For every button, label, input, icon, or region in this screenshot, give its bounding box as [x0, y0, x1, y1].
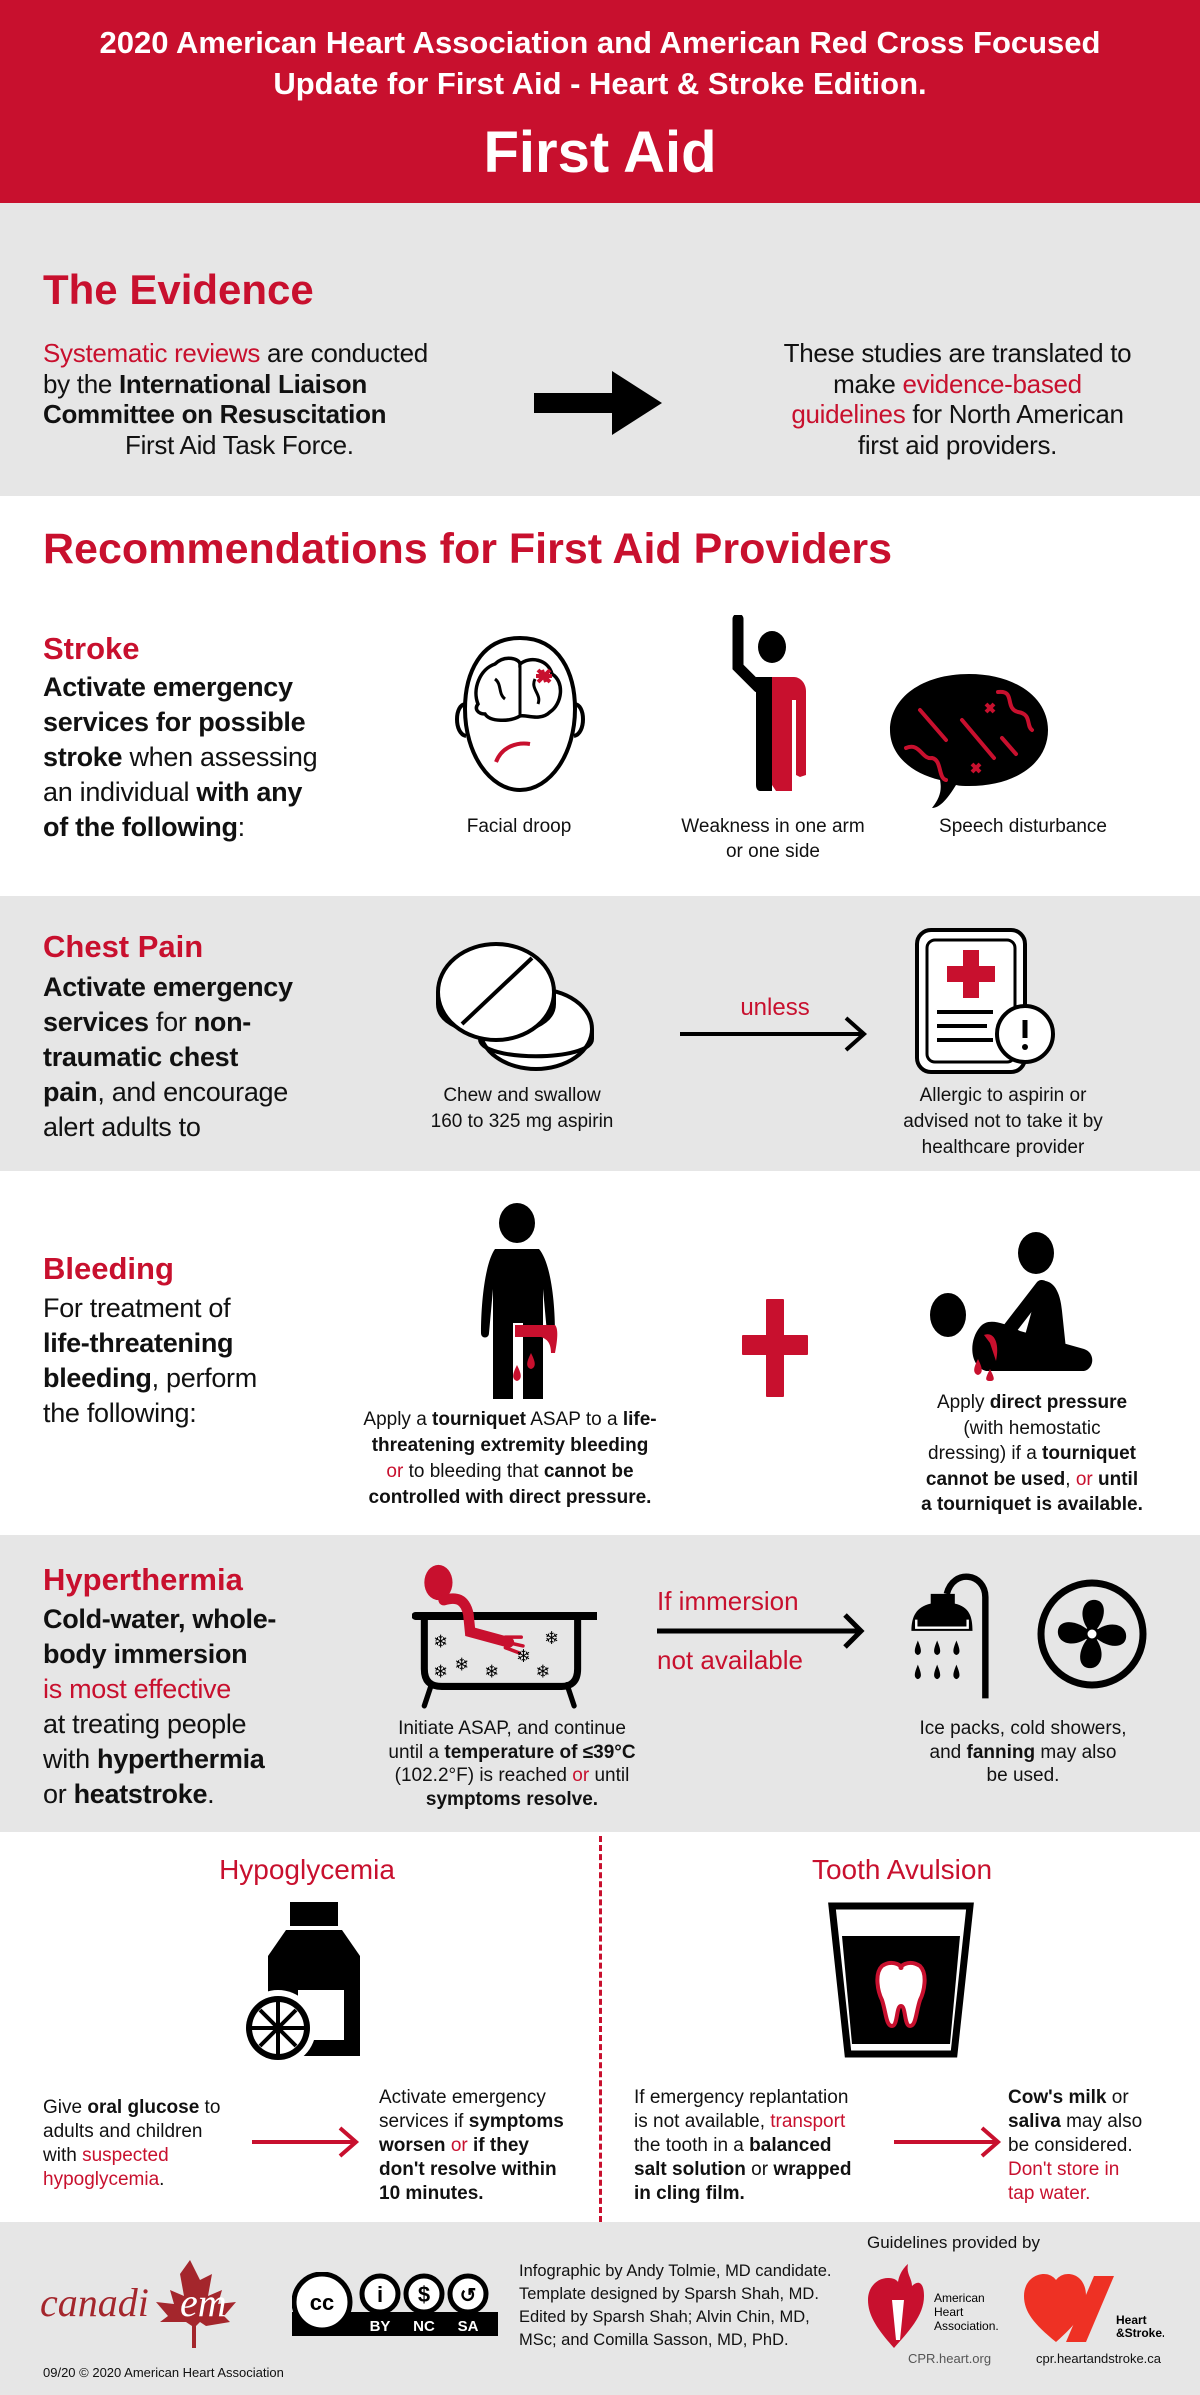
- credits text: MSc; and Comilla Sasson, MD, PhD.: [519, 2331, 789, 2349]
- icon: bathtub: ❄: [484, 1663, 499, 1683]
- icon: bathtub: ❄: [454, 1656, 469, 1676]
- activate ems text: 10 minutes.: [379, 2183, 484, 2204]
- tourniquet label: or to bleeding that cannot be: [386, 1461, 634, 1482]
- tourniquet label: Apply a tourniquet ASAP to a life-: [363, 1409, 657, 1430]
- recommendations heading: Recommendations for First Aid Providers: [43, 525, 892, 573]
- activate ems text: don't resolve within: [379, 2159, 557, 2180]
- chest pain text: traumatic chest: [43, 1042, 238, 1072]
- milk or saliva text: [1008, 2087, 1142, 2204]
- immersion label: until a temperature of ≤39°C: [388, 1742, 636, 1762]
- hyperthermia text: is most effective: [43, 1674, 231, 1704]
- logo: canadiem: canadi: [40, 2280, 149, 2325]
- arrow: hypoglycemia: [252, 2126, 359, 2158]
- hyperthermia text: with hyperthermia: [43, 1744, 264, 1774]
- icon: glucose bottle with lemon: [246, 1902, 360, 2060]
- icon: aspirin pills: [436, 942, 594, 1071]
- panel: tooth avulsion: [634, 1854, 1142, 2204]
- logo: heart and stroke: [1024, 2274, 1164, 2344]
- unless label: unless: [740, 994, 810, 1021]
- aspirin label: Chew and swallow: [443, 1085, 601, 1106]
- oral glucose text: with suspected: [43, 2145, 169, 2166]
- activate ems text: Activate emergency: [379, 2087, 546, 2108]
- panel: bleeding: [43, 1203, 1143, 1515]
- alternatives label: be used.: [987, 1765, 1059, 1786]
- evidence heading: The Evidence: [43, 266, 314, 313]
- stroke text: services for possible: [43, 707, 305, 737]
- transport text: If emergency replantation: [634, 2087, 848, 2108]
- alternatives label: Ice packs, cold showers,: [920, 1718, 1126, 1739]
- arrow: tooth: [894, 2126, 1001, 2158]
- milk or saliva text: Cow's milk or: [1008, 2087, 1129, 2108]
- tourniquet label: controlled with direct pressure.: [369, 1487, 651, 1508]
- logo: american heart association: American: [934, 2291, 985, 2305]
- tourniquet label: [363, 1409, 657, 1508]
- logo: creative commons: cc: [310, 2290, 334, 2315]
- bleeding text: [43, 1293, 257, 1428]
- stroke text: Activate emergency: [43, 672, 293, 702]
- bleeding text: the following:: [43, 1398, 196, 1428]
- logo: heart and stroke: &Stroke.: [1116, 2326, 1164, 2340]
- aha url: CPR.heart.org: [908, 2351, 991, 2366]
- icon: bathtub: ❄: [433, 1633, 448, 1653]
- chest pain text: services for non-: [43, 1007, 251, 1037]
- logo: creative commons: i: [377, 2282, 383, 2307]
- icon: direct pressure: [930, 1232, 1092, 1381]
- header banner: [0, 0, 1200, 203]
- hyperthermia text: body immersion: [43, 1639, 247, 1669]
- panel: hypoglycemia: [43, 1854, 564, 2204]
- milk or saliva text: be considered.: [1008, 2135, 1133, 2156]
- allergic label: healthcare provider: [922, 1137, 1084, 1158]
- direct pressure label: cannot be used, or until: [926, 1468, 1138, 1490]
- icon: plus: [742, 1299, 808, 1397]
- stroke icon labels: Facial droop: [467, 816, 571, 837]
- direct pressure label: (with hemostatic: [963, 1418, 1101, 1438]
- hypoglycemia heading: Hypoglycemia: [219, 1854, 395, 1885]
- transport text: [634, 2087, 851, 2204]
- transport text: is not available, transport: [634, 2111, 845, 2132]
- logo: american heart association: [868, 2260, 1008, 2352]
- icon: fan: [1038, 1580, 1146, 1688]
- chest pain text: Activate emergency: [43, 972, 293, 1002]
- hyperthermia text: or heatstroke.: [43, 1779, 214, 1809]
- credits text: [519, 2260, 831, 2352]
- panel: chest pain: [0, 896, 1200, 1171]
- icon: one-sided weakness figure: [732, 615, 806, 791]
- tourniquet label: threatening extremity bleeding: [372, 1435, 648, 1456]
- stroke text: stroke when assessing: [43, 742, 317, 772]
- immersion label: [388, 1718, 636, 1810]
- oral glucose text: hypoglycemia.: [43, 2169, 164, 2190]
- evidence left text: [43, 338, 428, 460]
- panel: hyperthermia: [0, 1535, 1200, 1832]
- credits text: Infographic by Andy Tolmie, MD candidate.: [519, 2262, 831, 2280]
- heart and stroke url: cpr.heartandstroke.ca: [1036, 2351, 1161, 2366]
- alternatives label: [920, 1718, 1126, 1786]
- icon: clipboard: [915, 928, 1055, 1074]
- stroke text: [43, 672, 317, 842]
- milk or saliva text: tap water.: [1008, 2183, 1090, 2204]
- icon: speech bubble: [890, 674, 1048, 808]
- icon: bathtub: ❄: [516, 1647, 531, 1667]
- guidelines provided by: Guidelines provided by: [867, 2233, 1040, 2252]
- hyperthermia text: [43, 1604, 276, 1809]
- main title: First Aid: [483, 120, 717, 185]
- logo: creative commons: NC: [413, 2318, 435, 2335]
- evidence right text: These studies are translated to: [784, 338, 1131, 368]
- immersion label: symptoms resolve.: [426, 1788, 598, 1810]
- icon: bathtub: ❄: [433, 1663, 448, 1683]
- logo: american heart association: Heart: [934, 2305, 964, 2319]
- evidence left text: by the International Liaison: [43, 368, 367, 398]
- hyperthermia heading: Hyperthermia: [43, 1562, 243, 1597]
- direct pressure label: Apply direct pressure: [937, 1392, 1127, 1413]
- arrow: unless: [680, 1016, 867, 1052]
- allergic label: [903, 1085, 1103, 1158]
- allergic label: Allergic to aspirin or: [920, 1085, 1086, 1106]
- chest pain heading: Chest Pain: [43, 929, 203, 964]
- if immersion label: If immersion: [657, 1586, 799, 1616]
- header subtitle: Update for First Aid - Heart & Stroke Edition.: [273, 66, 927, 101]
- logo: creative commons: ↺: [460, 2285, 476, 2307]
- bleeding text: life-threatening: [43, 1328, 233, 1358]
- milk or saliva text: Don't store in: [1008, 2159, 1119, 2180]
- direct pressure label: dressing) if a tourniquet: [928, 1443, 1136, 1464]
- transport text: in cling film.: [634, 2183, 745, 2204]
- icon: bathtub: ❄: [544, 1629, 559, 1649]
- header subtitle: [100, 25, 1100, 101]
- icon: bathtub: ❄: [535, 1663, 550, 1683]
- evidence right text: make evidence-based: [833, 368, 1082, 398]
- panel: the evidence: [0, 203, 1200, 496]
- logo: heart and stroke: Heart: [1116, 2313, 1147, 2327]
- panel: stroke: Speech disturbance: [939, 816, 1107, 837]
- logo: canadiem: [40, 2260, 236, 2348]
- footer: [0, 2222, 1200, 2395]
- bleeding heading: Bleeding: [43, 1251, 174, 1286]
- oral glucose text: Give oral glucose to: [43, 2097, 220, 2118]
- transport text: the tooth in a balanced: [634, 2135, 832, 2156]
- tooth avulsion heading: Tooth Avulsion: [812, 1854, 992, 1885]
- not available label: not available: [657, 1645, 803, 1675]
- stroke text: of the following:: [43, 812, 245, 842]
- alternatives label: and fanning may also: [930, 1742, 1116, 1762]
- credits text: Template designed by Sparsh Shah, MD.: [519, 2285, 819, 2303]
- evidence left text: Systematic reviews are conducted: [43, 338, 428, 368]
- chest pain text: pain, and encourage: [43, 1077, 288, 1107]
- allergic label: advised not to take it by: [903, 1111, 1103, 1132]
- direct pressure label: [921, 1392, 1143, 1515]
- transport text: salt solution or wrapped: [634, 2159, 851, 2180]
- evidence left text: First Aid Task Force.: [125, 430, 354, 460]
- panel: stroke: [43, 615, 1107, 862]
- icon: bathtub: [412, 1564, 597, 1708]
- copyright: 09/20 © 2020 American Heart Association: [43, 2365, 284, 2380]
- divider: dashed: [599, 1836, 602, 2222]
- evidence right text: first aid providers.: [858, 430, 1057, 460]
- chest pain text: alert adults to: [43, 1112, 201, 1142]
- arrow: evidence: [534, 371, 662, 435]
- panel: stroke: Weakness in one arm: [681, 816, 865, 837]
- hyperthermia text: at treating people: [43, 1709, 246, 1739]
- logo: american heart association: Association.: [934, 2319, 999, 2333]
- credits text: Edited by Sparsh Shah; Alvin Chin, MD,: [519, 2308, 810, 2326]
- activate ems text: [379, 2087, 564, 2204]
- header subtitle: 2020 American Heart Association and American Red Cross Focused: [100, 25, 1100, 60]
- icon: glass with tooth: [828, 1902, 974, 2058]
- stroke heading: Stroke: [43, 631, 139, 666]
- bleeding text: For treatment of: [43, 1293, 230, 1323]
- hyperthermia text: Cold-water, whole-: [43, 1604, 276, 1634]
- aspirin label: 160 to 325 mg aspirin: [431, 1111, 613, 1132]
- icon: tourniquet person: [480, 1203, 558, 1399]
- stroke text: an individual with any: [43, 777, 302, 807]
- oral glucose text: adults and children: [43, 2121, 202, 2142]
- arrow: if immersion not available: [657, 1613, 864, 1649]
- panel: stroke: or one side: [726, 841, 820, 862]
- chest pain text: [43, 972, 293, 1142]
- immersion label: (102.2°F) is reached or until: [395, 1765, 629, 1786]
- logo: creative commons: $: [418, 2282, 430, 2307]
- evidence right text: [784, 338, 1131, 460]
- evidence left text: Committee on Resuscitation: [43, 399, 386, 429]
- direct pressure label: a tourniquet is available.: [921, 1494, 1143, 1515]
- logo: creative commons: [292, 2272, 498, 2338]
- activate ems text: worsen or if they: [379, 2135, 529, 2156]
- activate ems text: services if symptoms: [379, 2111, 564, 2132]
- logo: creative commons: SA: [458, 2318, 479, 2335]
- milk or saliva text: saliva may also: [1008, 2111, 1142, 2132]
- oral glucose text: [43, 2097, 220, 2190]
- bleeding text: bleeding, perform: [43, 1363, 257, 1393]
- evidence right text: guidelines for North American: [791, 399, 1124, 429]
- icon: shower: [911, 1574, 989, 1698]
- aspirin label: [431, 1085, 613, 1132]
- logo: canadiem: em: [180, 2280, 227, 2325]
- immersion label: Initiate ASAP, and continue: [398, 1718, 626, 1739]
- icon: facial droop head: [455, 636, 585, 792]
- logo: creative commons: BY: [370, 2318, 390, 2335]
